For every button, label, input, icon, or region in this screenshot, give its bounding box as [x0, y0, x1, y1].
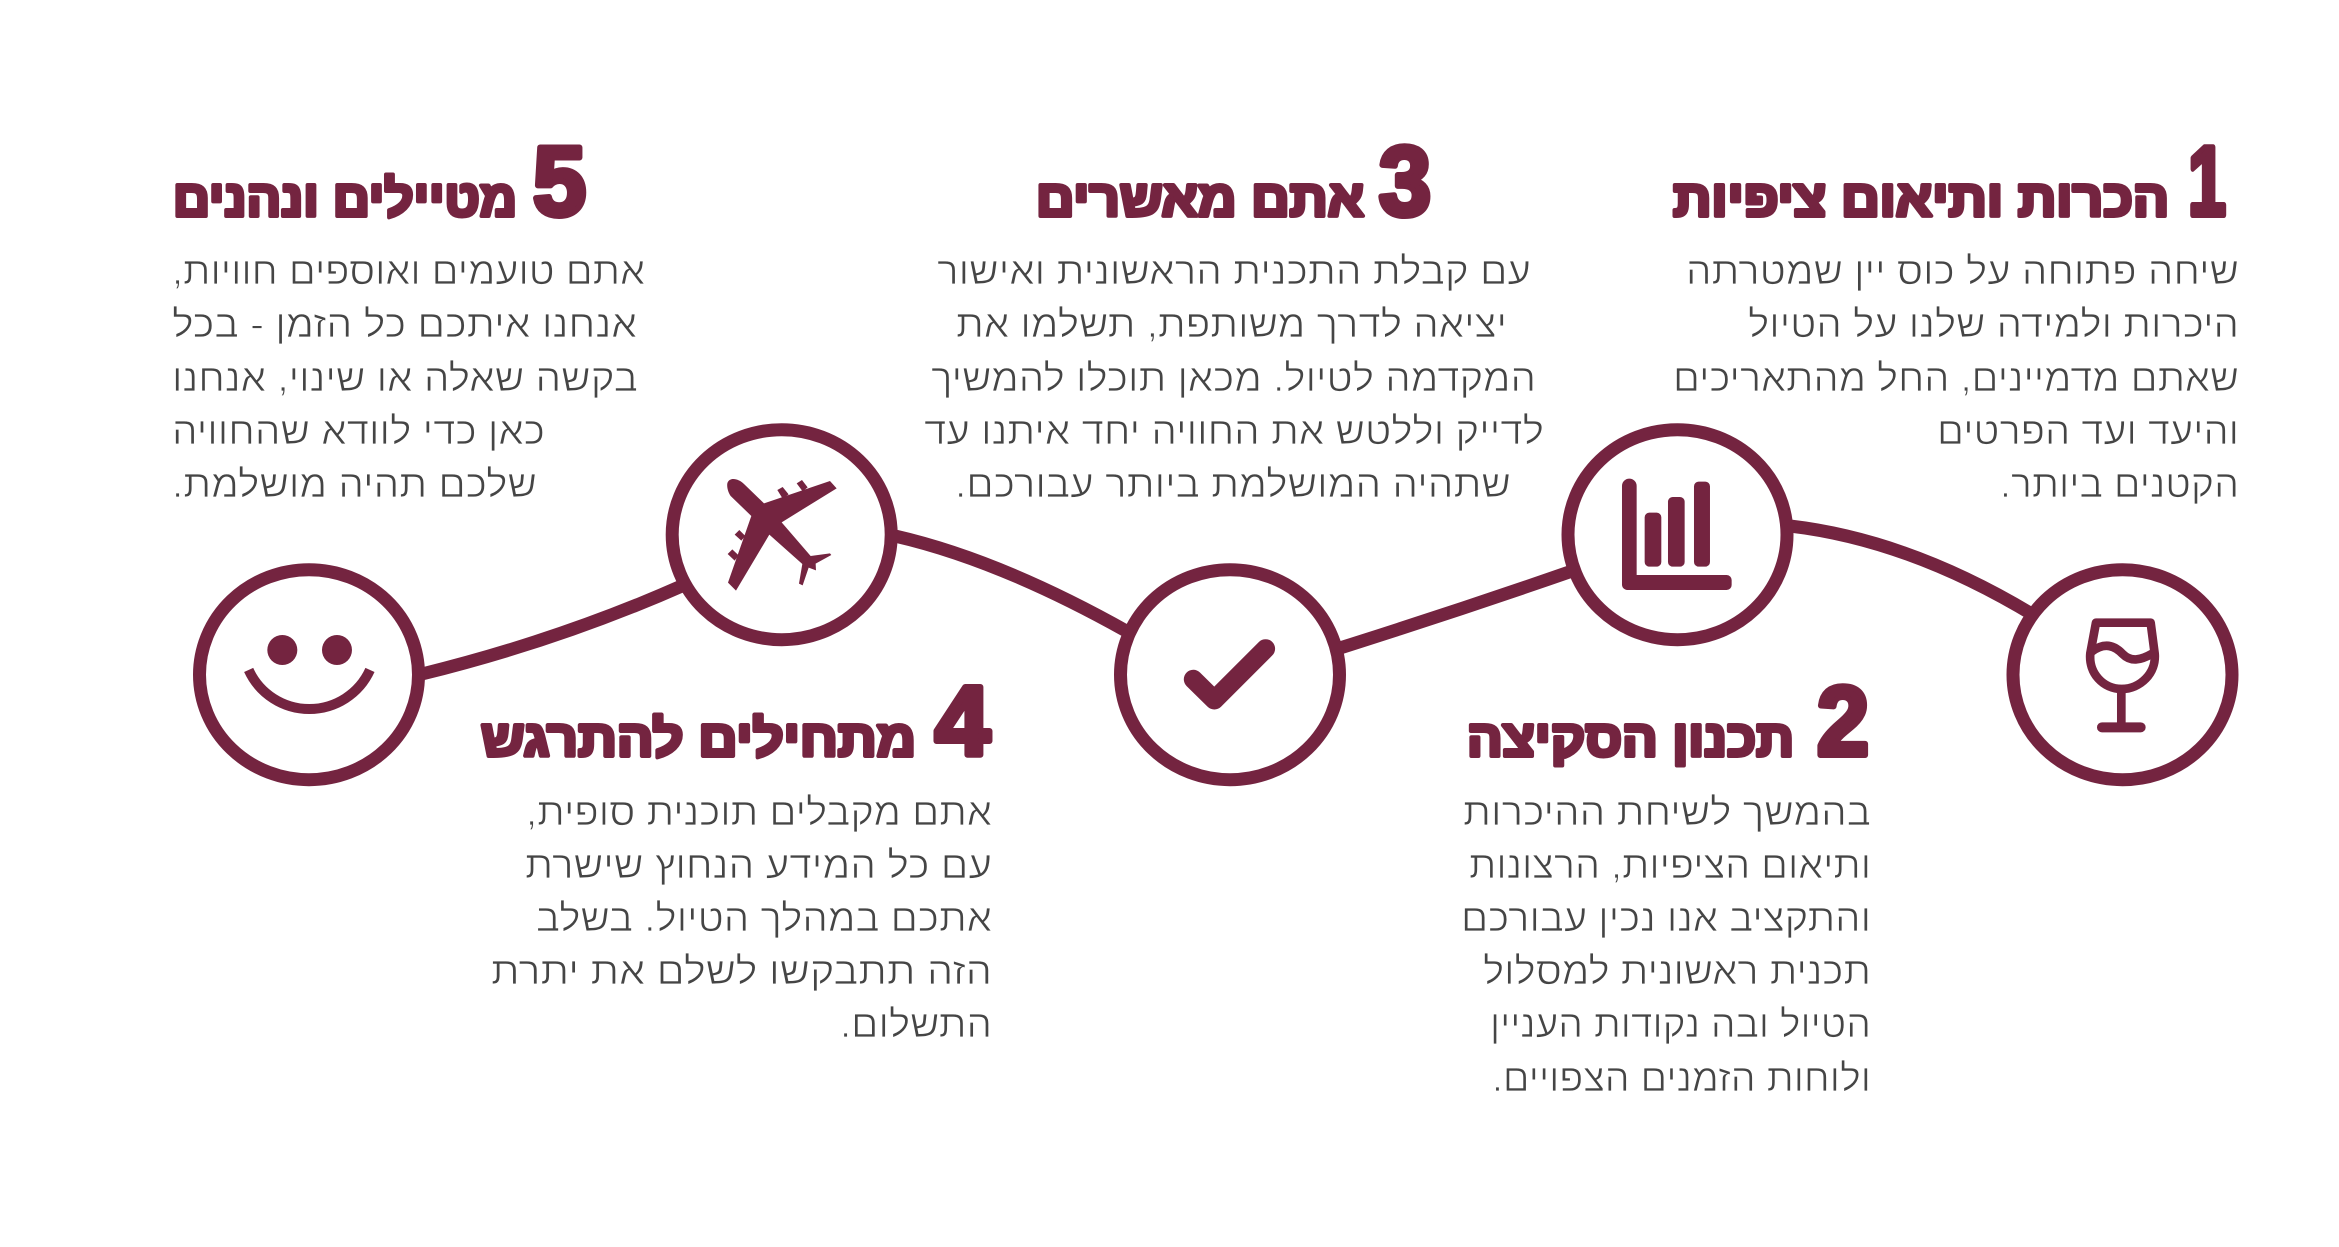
- body text: step 5: [172, 251, 645, 506]
- body text: step 1: [1673, 251, 2239, 506]
- connecting path between steps: [422, 526, 2035, 674]
- body text: step 2: הטיול ובה נקודות העניין: [1490, 1004, 1871, 1046]
- body text: step 2: תכנית ראשונית למסלול: [1483, 951, 1871, 993]
- body text: step 4: [491, 792, 992, 1046]
- body text: step 5: בקשה שאלה או שינוי, אנחנו: [172, 358, 638, 400]
- icon: bar chart in circle: [1568, 430, 1787, 640]
- body text: step 5: אתם טועמים ואוספים חוויות,: [172, 251, 645, 293]
- body text: step 5: שלכם תהיה מושלמת.: [172, 464, 537, 506]
- body text: step 3: יציאה לדרך משותפת, תשלמו את: [956, 304, 1507, 346]
- body text: step 1: והיעד ועד הפרטים: [1937, 411, 2239, 453]
- body text: step 2: [1461, 792, 1871, 1100]
- icon: wine glass in circle: [2013, 570, 2232, 780]
- body text: step 1: שאתם מדמיינים, החל מהתאריכים: [1673, 358, 2239, 400]
- body text: step 3: שתהיה המושלמת ביותר עבורכם.: [955, 464, 1511, 506]
- body text: step 2: ותיאום הציפיות, הרצונות: [1469, 845, 1871, 887]
- heading: step 2: תכנון הסקיצה: [1467, 710, 1794, 767]
- body text: step 1: הקטנים ביותר.: [2000, 464, 2239, 506]
- heading: step 1: הכרות ותיאום ציפיות: [1673, 170, 2169, 227]
- number 2: 2: [1817, 666, 1869, 776]
- body text: step 3: [924, 251, 1544, 506]
- icon: airplane in circle: [672, 430, 891, 640]
- body text: step 4: הזה תתבקשו לשלם את יתרת: [491, 951, 992, 993]
- body text: step 5: כאן כדי לוודא שהחוויה: [172, 411, 545, 453]
- body text: step 4: אתכם במהלך הטיול. בשלב: [536, 898, 992, 940]
- panel: step 5: [172, 126, 645, 506]
- number 3: 3: [1379, 126, 1431, 236]
- body text: step 1: שיחה פתוחה על כוס יין שמטרתה: [1686, 251, 2239, 293]
- number 5: 5: [533, 126, 586, 236]
- body text: step 3: עם קבלת התכנית הראשונית ואישור: [937, 251, 1531, 293]
- body text: step 4: אתם מקבלים תוכנית סופית,: [526, 792, 992, 834]
- number 1: 1: [2188, 126, 2226, 236]
- heading: step 4: מתחילים להתרגש: [481, 710, 916, 767]
- heading: step 3: אתם מאשרים: [1036, 170, 1364, 227]
- number 4: 4: [935, 666, 990, 776]
- body text: step 3: המקדמה לטיול. מכאן תוכלו להמשיך: [931, 358, 1536, 400]
- body text: step 1: היכרות ולמידה שלנו על הטיול: [1748, 304, 2239, 346]
- body text: step 4: התשלום.: [840, 1004, 992, 1046]
- icon: smiley in circle: [200, 570, 418, 780]
- heading: step 5: מטיילים ונהנים: [173, 170, 517, 227]
- body text: step 3: לדייק וללטש את החוויה יחד איתנו עד: [924, 411, 1544, 453]
- body text: step 2: ולוחות הזמנים הצפויים.: [1492, 1058, 1871, 1100]
- panel: step 1: [1673, 126, 2239, 506]
- body text: step 2: והתקציב אנו נכין עבורכם: [1461, 898, 1871, 940]
- body text: step 4: עם כל המידע הנחוץ שישרת: [525, 845, 992, 887]
- body text: step 5: אנחנו איתכם כל הזמן - בכל: [172, 304, 637, 346]
- panel: step 3: [924, 126, 1544, 506]
- icon: check mark in circle: [1120, 570, 1340, 780]
- body text: step 2: בהמשך לשיחת ההיכרות: [1463, 792, 1871, 834]
- panel: step 4: [481, 666, 992, 1046]
- panel: step 2: [1461, 666, 1871, 1100]
